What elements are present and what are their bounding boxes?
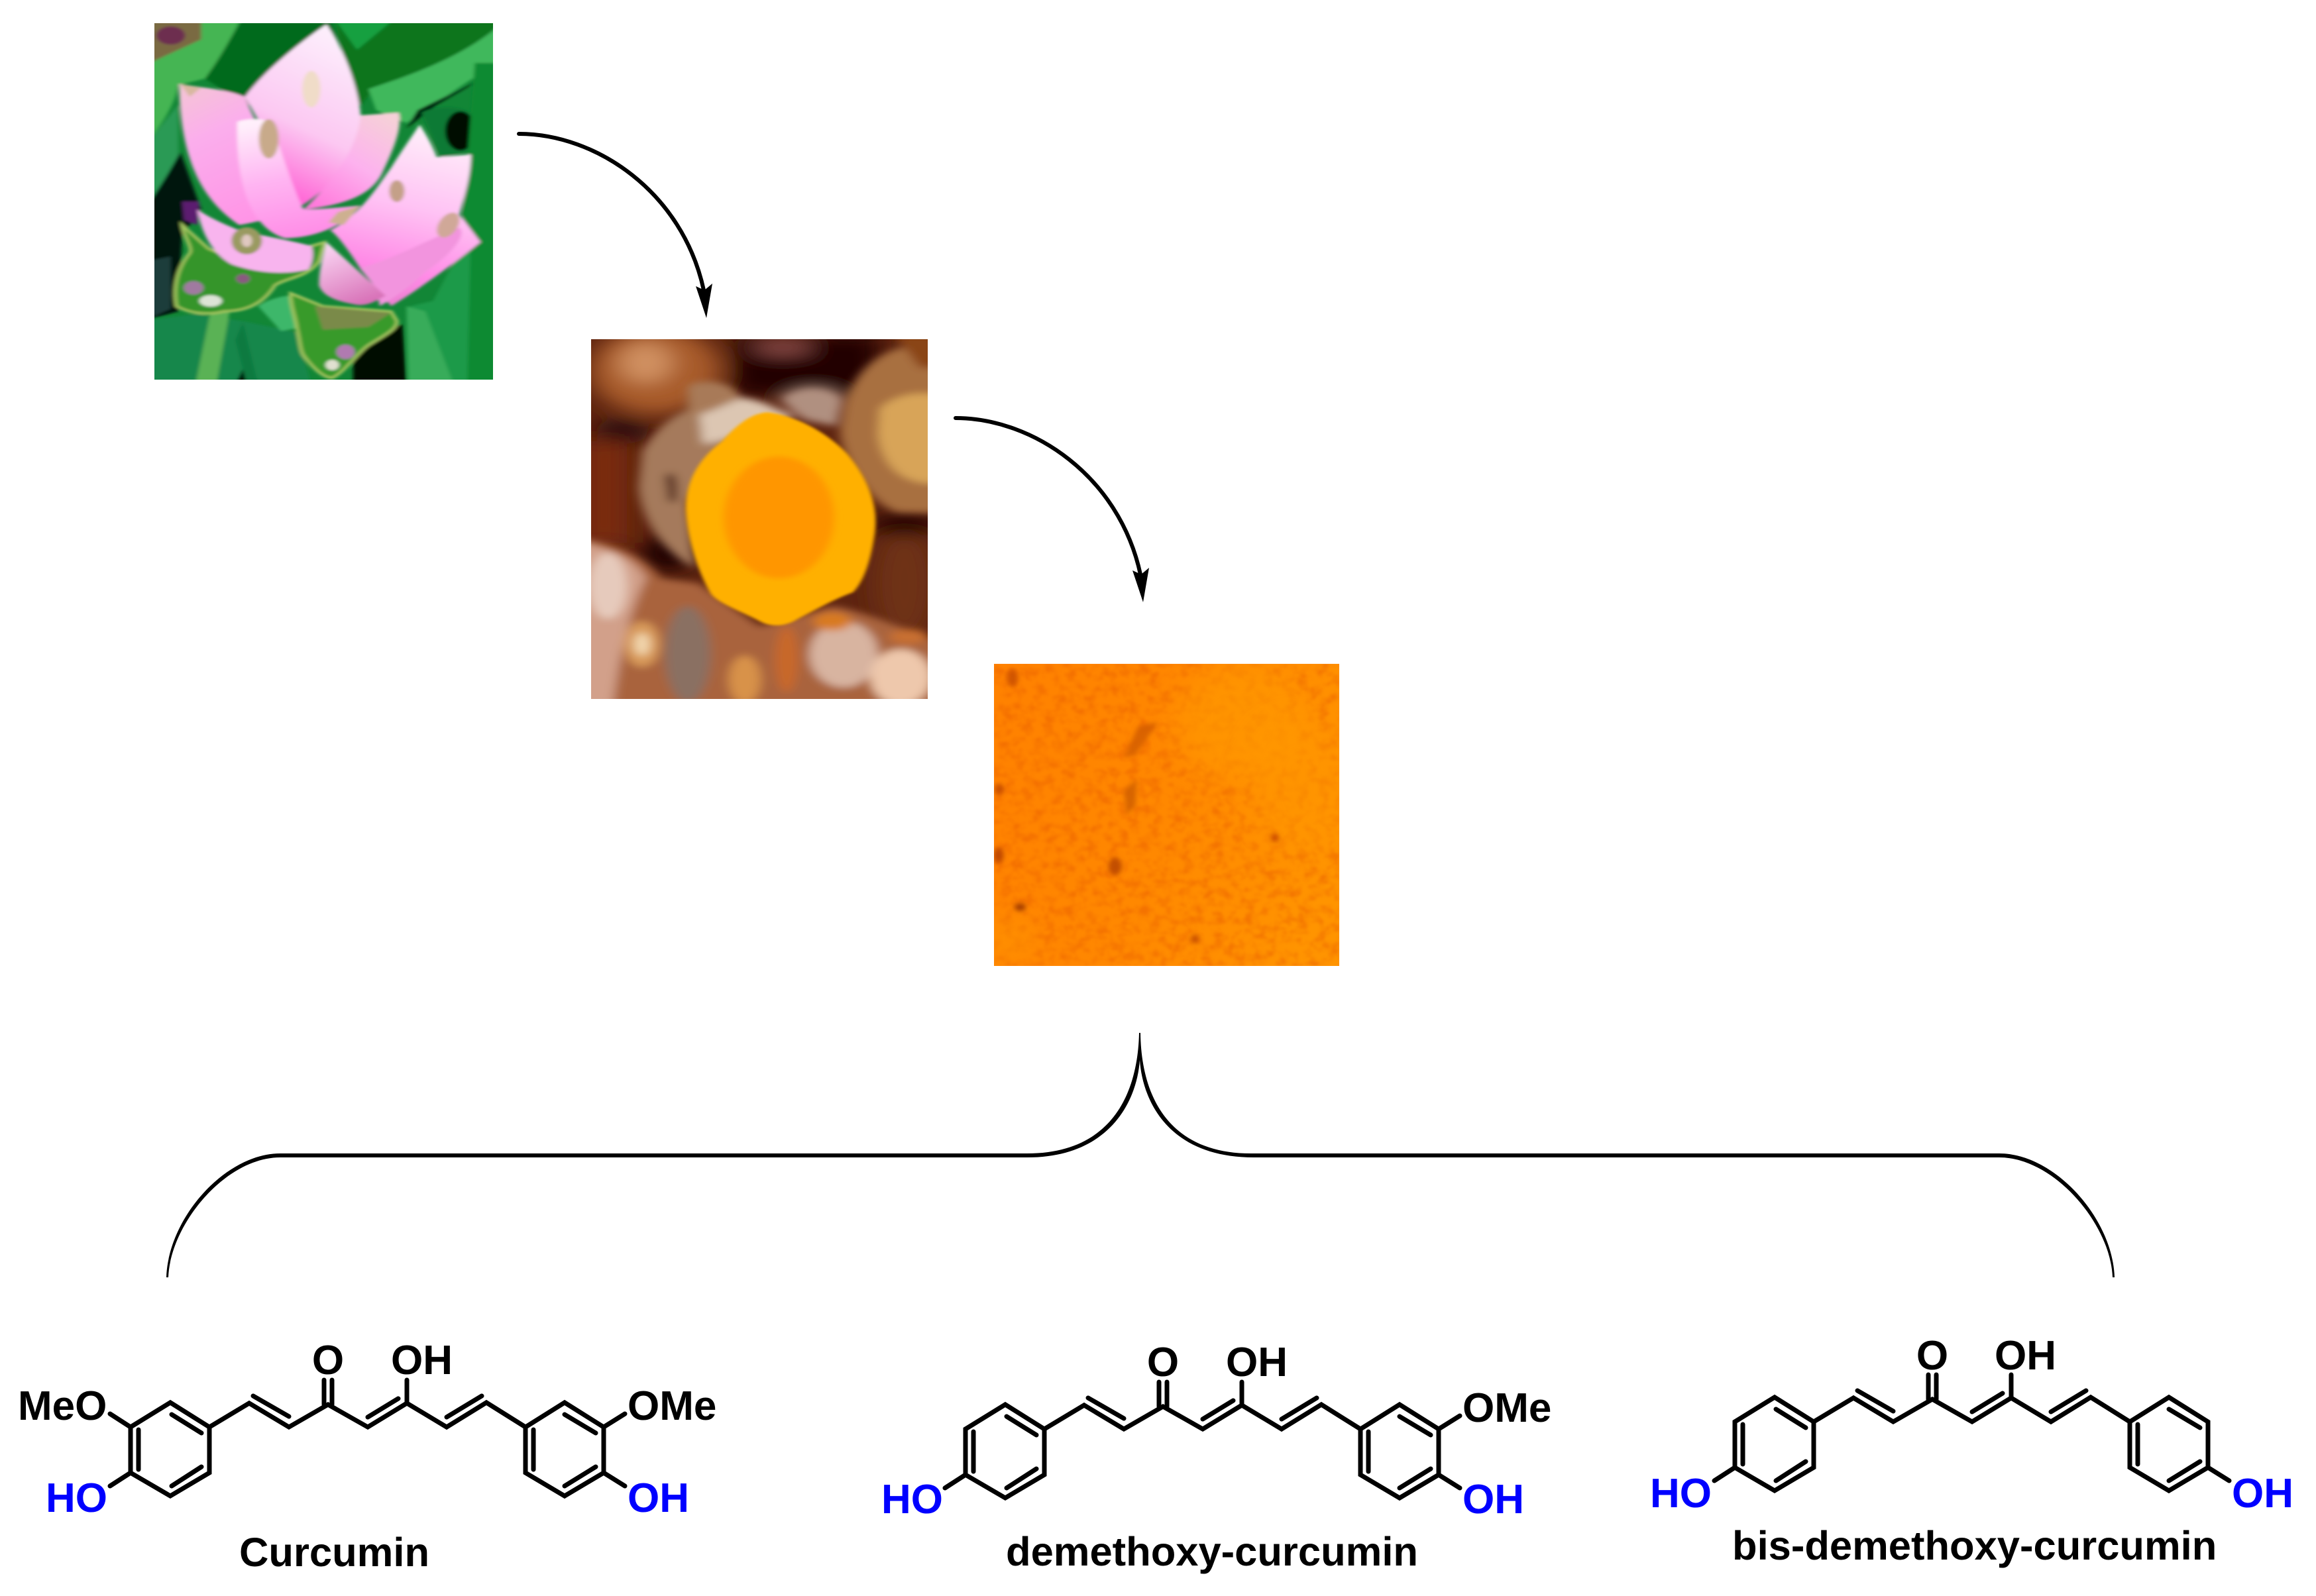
label: OMe: OMe xyxy=(628,1383,716,1429)
label: HO: HO xyxy=(1650,1471,1712,1516)
label: phenol OH: OH xyxy=(628,1475,689,1521)
label: enol OH: OH xyxy=(1995,1333,2056,1379)
label: carbonyl O: O xyxy=(1916,1333,1948,1379)
name: Curcumin: Curcumin xyxy=(239,1530,429,1575)
label: carbonyl O: O xyxy=(1147,1340,1179,1385)
photo: cut turmeric rhizome xyxy=(591,339,928,699)
leaves and background xyxy=(205,19,360,110)
bonds: demethoxy-curcumin skeleton xyxy=(945,1382,1460,1498)
molecule: demethoxy-curcumin xyxy=(881,1340,1551,1575)
bracts xyxy=(175,225,325,313)
label: carbonyl O: O xyxy=(312,1338,344,1383)
photo: turmeric flower xyxy=(154,23,493,380)
label: enol OH: OH xyxy=(391,1338,453,1383)
label: OMe: OMe xyxy=(1462,1385,1551,1431)
name: demethoxy-curcumin: demethoxy-curcumin xyxy=(1006,1529,1418,1575)
label: MeO: MeO xyxy=(18,1383,107,1429)
petals xyxy=(197,209,313,272)
label: phenol OH: OH xyxy=(2232,1471,2293,1516)
photo: turmeric powder xyxy=(994,664,1339,966)
arrow: rhizome to powder xyxy=(956,418,1149,602)
label: phenol OH: OH xyxy=(1462,1477,1524,1522)
bracket: powder splitting into three curcuminoids xyxy=(166,1033,2115,1277)
name: bis-demethoxy-curcumin: bis-demethoxy-curcumin xyxy=(1732,1523,2217,1569)
label: enol OH: OH xyxy=(1226,1340,1288,1385)
arrow: flower to rhizome xyxy=(519,134,712,318)
molecule: curcumin xyxy=(18,1338,716,1575)
label: HO: HO xyxy=(881,1477,943,1522)
molecule: bis-demethoxy-curcumin xyxy=(1650,1333,2293,1569)
label: HO: HO xyxy=(46,1475,107,1521)
bonds: curcumin skeleton xyxy=(110,1380,625,1496)
bonds: bis-demethoxy-curcumin skeleton xyxy=(1714,1375,2229,1491)
